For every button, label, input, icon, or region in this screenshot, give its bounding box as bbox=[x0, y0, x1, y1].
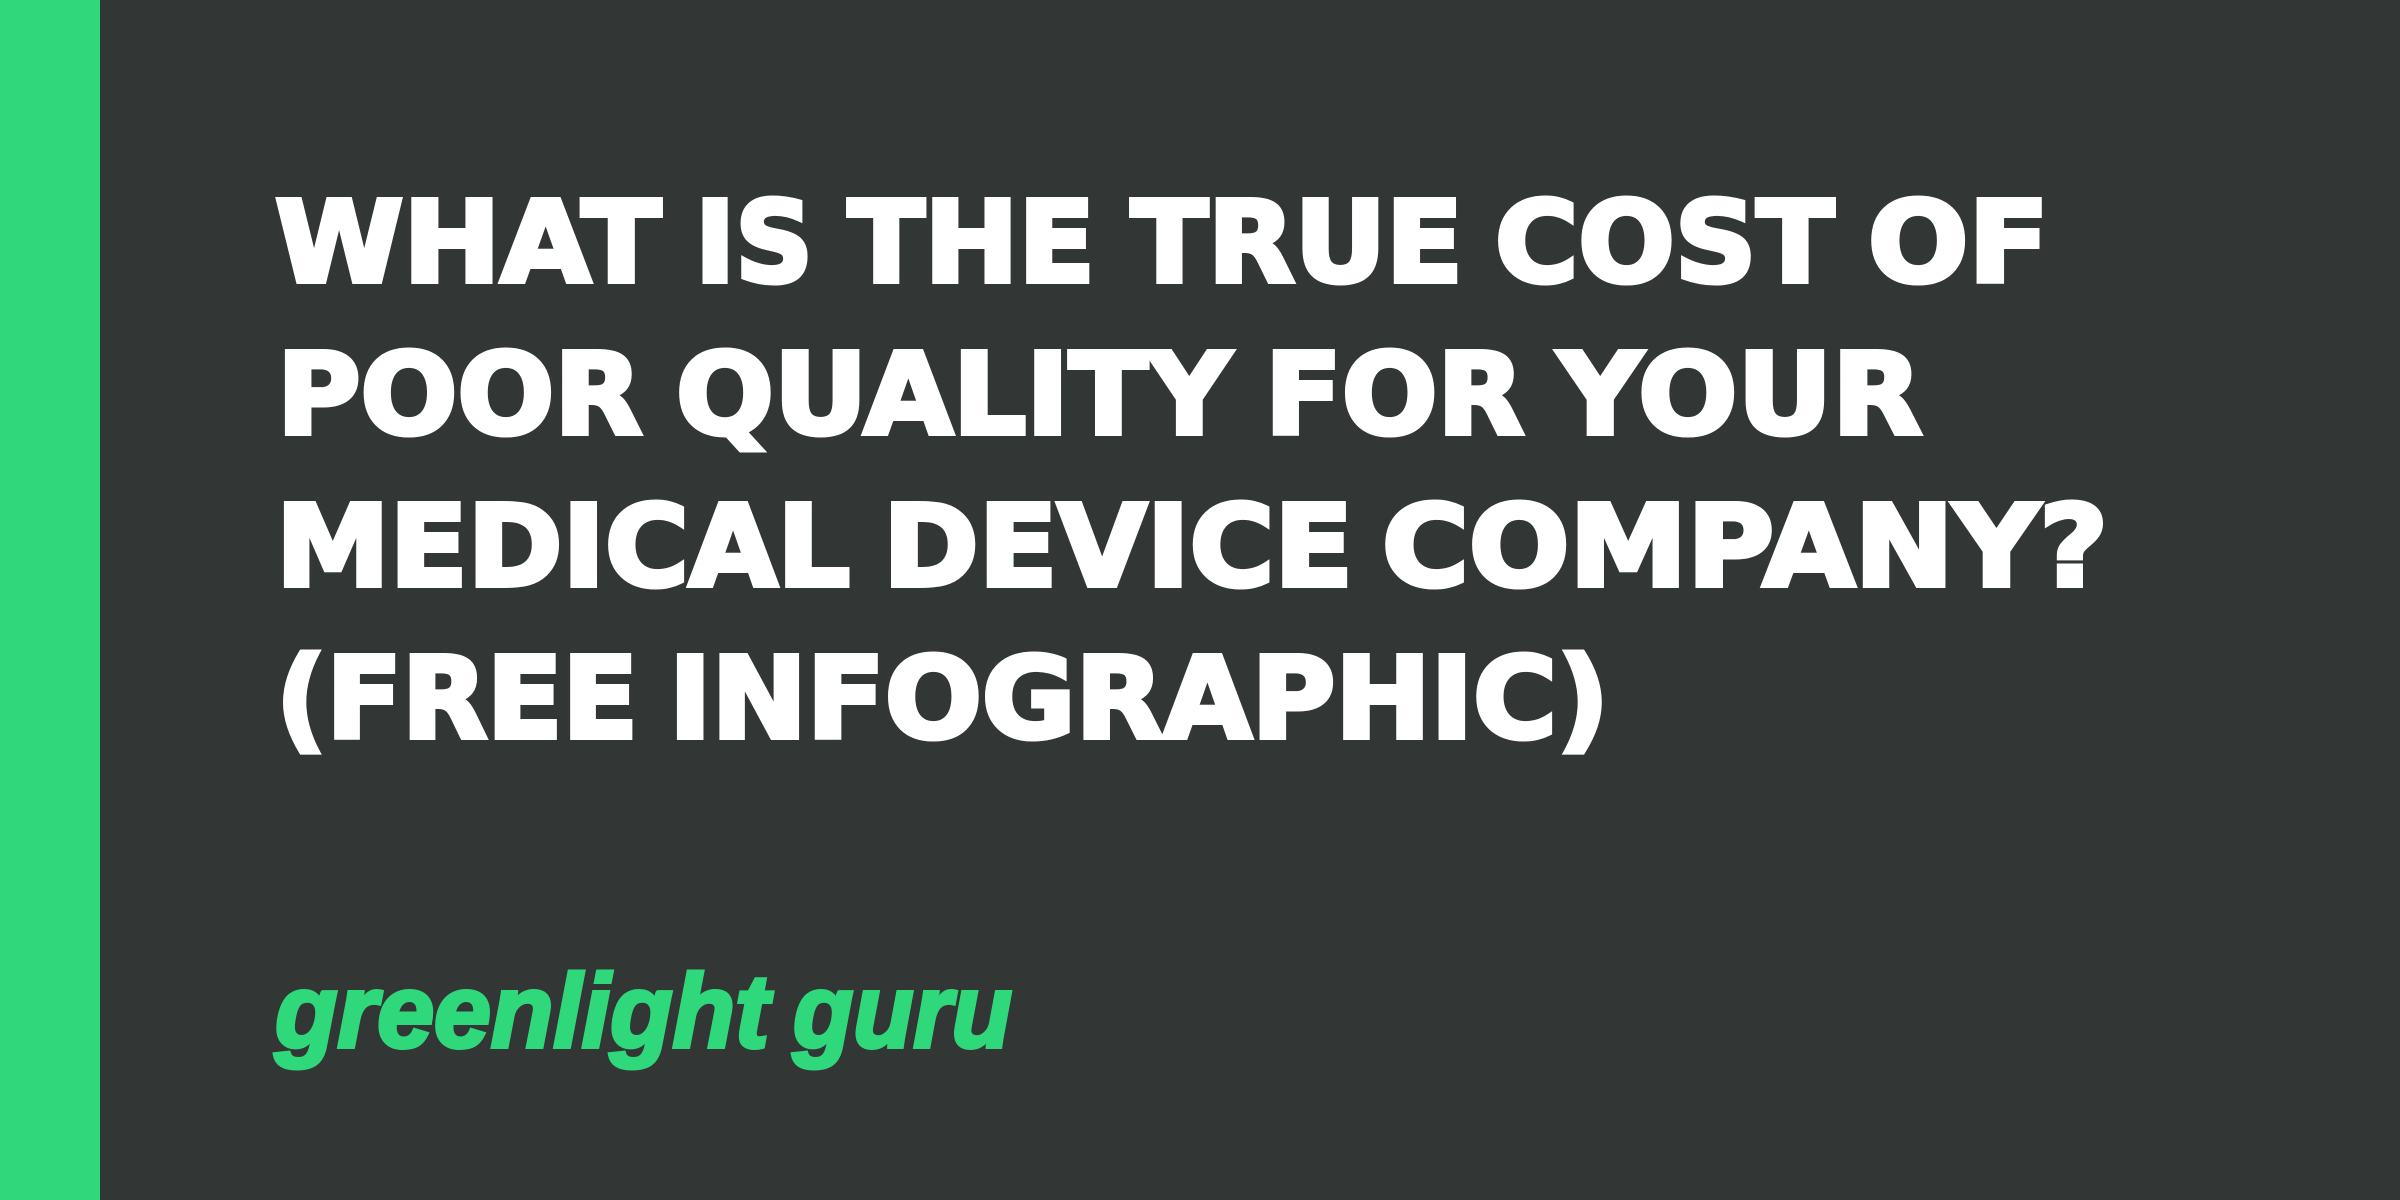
title: COMPANY? bbox=[1382, 482, 2108, 612]
title: THE bbox=[848, 178, 1095, 308]
title: MEDICAL bbox=[276, 482, 850, 612]
title: FOR bbox=[1265, 330, 1524, 460]
title: DEVICE bbox=[883, 482, 1353, 612]
title: (FREE bbox=[276, 634, 638, 764]
logo: greenlight guru: guru bbox=[792, 954, 1012, 1070]
logo: greenlight guru: greenlight bbox=[274, 954, 773, 1070]
title: TRUE bbox=[1131, 178, 1463, 308]
title: YOUR bbox=[1556, 330, 1922, 460]
title bbox=[275, 178, 2108, 764]
title: OF bbox=[1868, 178, 2049, 308]
logo: greenlight guru bbox=[274, 954, 1012, 1070]
title: WHAT bbox=[275, 178, 661, 308]
title: COST bbox=[1495, 178, 1834, 308]
title: QUALITY bbox=[676, 330, 1233, 460]
title: INFOGRAPHIC) bbox=[669, 634, 1609, 764]
green accent bar bbox=[0, 0, 100, 1200]
title: POOR bbox=[277, 330, 642, 460]
title: IS bbox=[695, 178, 813, 308]
